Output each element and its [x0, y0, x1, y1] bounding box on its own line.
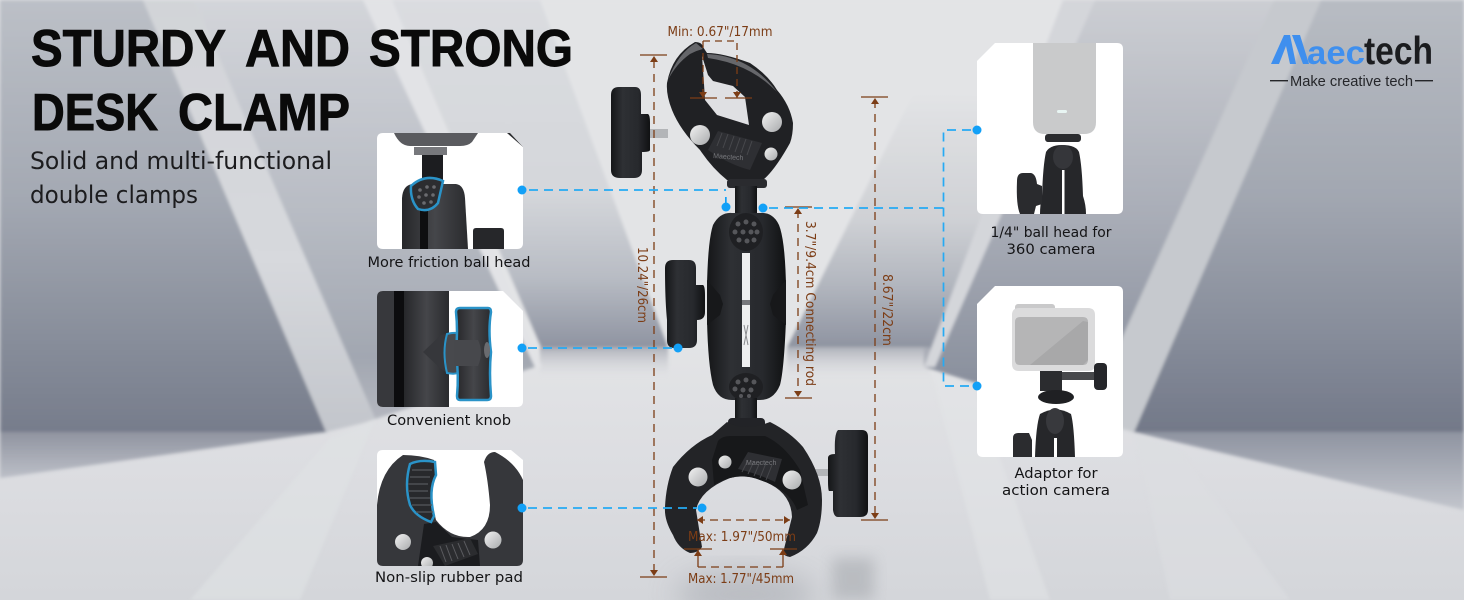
panel: rubber pad — [375, 450, 523, 586]
panel: convenient knob — [377, 291, 523, 429]
8.67 line — [874, 100, 876, 518]
dimension labels: Max: 1.97"/50mm — [688, 530, 796, 545]
right knob — [812, 430, 868, 517]
dimension labels — [634, 25, 894, 587]
top ball stem — [727, 179, 767, 188]
bottom clamp: Maectech — [746, 460, 776, 467]
Min jaw — [703, 41, 737, 98]
middle knob — [665, 260, 705, 348]
product: double clamp arm — [611, 42, 868, 557]
lower stem — [735, 398, 757, 424]
label: 1/4" ball head for — [990, 225, 1112, 241]
callout dots — [518, 126, 982, 512]
top clamp: Maectech — [713, 153, 744, 162]
dimension labels: Min: 0.67"/17mm — [668, 25, 772, 40]
label: 360 camera — [1006, 242, 1096, 258]
panel: friction ball head — [368, 133, 530, 271]
top clamp — [667, 42, 793, 180]
centre arm — [707, 213, 786, 401]
3.7 line — [797, 210, 799, 396]
title: STURDY — [31, 20, 226, 78]
label: Non-slip rubber pad — [375, 570, 523, 586]
dimension arrowheads — [650, 56, 879, 576]
label: Adaptor for — [1014, 466, 1098, 482]
label — [1002, 466, 1110, 499]
label: action camera — [1002, 483, 1110, 499]
label: Convenient knob — [387, 413, 511, 429]
dimension labels: 3.7"/9.4cm Connecting rod — [802, 221, 817, 386]
title: STRONG — [369, 20, 573, 78]
title: CLAMP — [178, 84, 350, 142]
top knob — [611, 87, 668, 178]
callout connector lines — [528, 130, 971, 508]
stem — [735, 186, 757, 214]
logo: Maectech: Make creative tech — [1290, 74, 1413, 90]
logo: Maectech — [1270, 30, 1433, 90]
subtitle: double clamps — [30, 181, 198, 209]
panel: action camera adaptor — [977, 286, 1123, 499]
label — [990, 225, 1112, 258]
10.24 line — [653, 60, 655, 576]
dimension lines — [640, 41, 888, 577]
title — [31, 20, 573, 142]
dimension labels: 8.67"/22cm — [879, 274, 894, 346]
subtitle: Solid and multi-functional — [30, 147, 332, 175]
dimension labels: 10.24"/26cm — [634, 247, 649, 323]
dimension labels: Max: 1.77"/45mm — [688, 572, 794, 587]
Max jaws — [697, 519, 790, 521]
logo: Maectech: aec — [1307, 34, 1365, 71]
bottom clamp — [665, 422, 822, 557]
title: DESK — [32, 84, 158, 142]
subtitle — [30, 147, 332, 209]
title: AND — [245, 20, 350, 78]
logo: Maectech: tech — [1364, 30, 1433, 73]
label: More friction ball head — [368, 255, 530, 271]
panel: 360 camera ball head — [977, 43, 1123, 258]
